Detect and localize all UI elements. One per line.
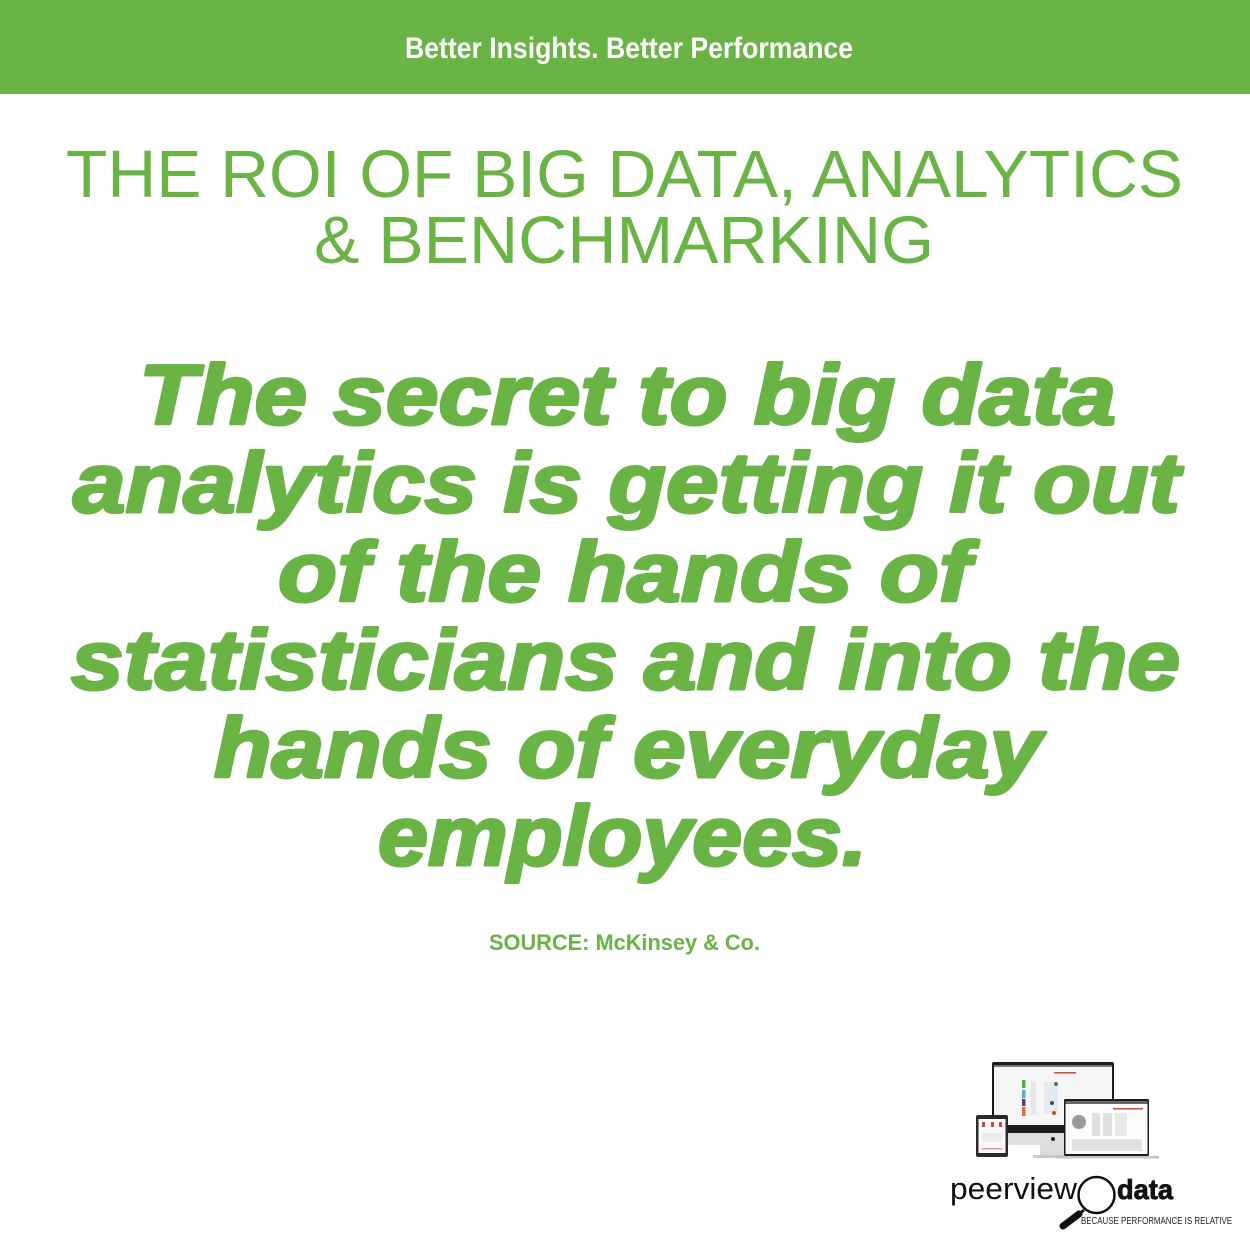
source line: SOURCE: McKinsey & Co. <box>489 930 760 955</box>
icon: desktop monitor <box>992 1062 1114 1158</box>
logo: devices and peerview data wordmark <box>950 1062 1232 1227</box>
wordmark: peerview <box>950 1171 1078 1206</box>
title: THE ROI OF BIG DATA, ANALYTICS <box>66 137 1183 212</box>
quote text: analytics is getting it out <box>73 436 1183 530</box>
icon: tablet <box>976 1115 1008 1157</box>
wordmark <box>950 1171 1232 1227</box>
quote text: The secret to big data <box>139 348 1116 442</box>
header banner <box>0 0 1250 94</box>
icon: magnifying glass <box>1063 1177 1114 1226</box>
icon: laptop <box>1055 1099 1159 1158</box>
quote text: hands of everyday <box>214 701 1047 795</box>
title <box>66 137 1183 278</box>
header banner: Better Insights. Better Performance <box>405 32 853 65</box>
wordmark: data <box>1117 1174 1173 1205</box>
quote text: employees. <box>378 789 867 883</box>
quote text <box>71 348 1183 883</box>
quote text: of the hands of <box>278 525 979 619</box>
quote text: statisticians and into the <box>71 613 1180 707</box>
title: & BENCHMARKING <box>314 203 934 278</box>
